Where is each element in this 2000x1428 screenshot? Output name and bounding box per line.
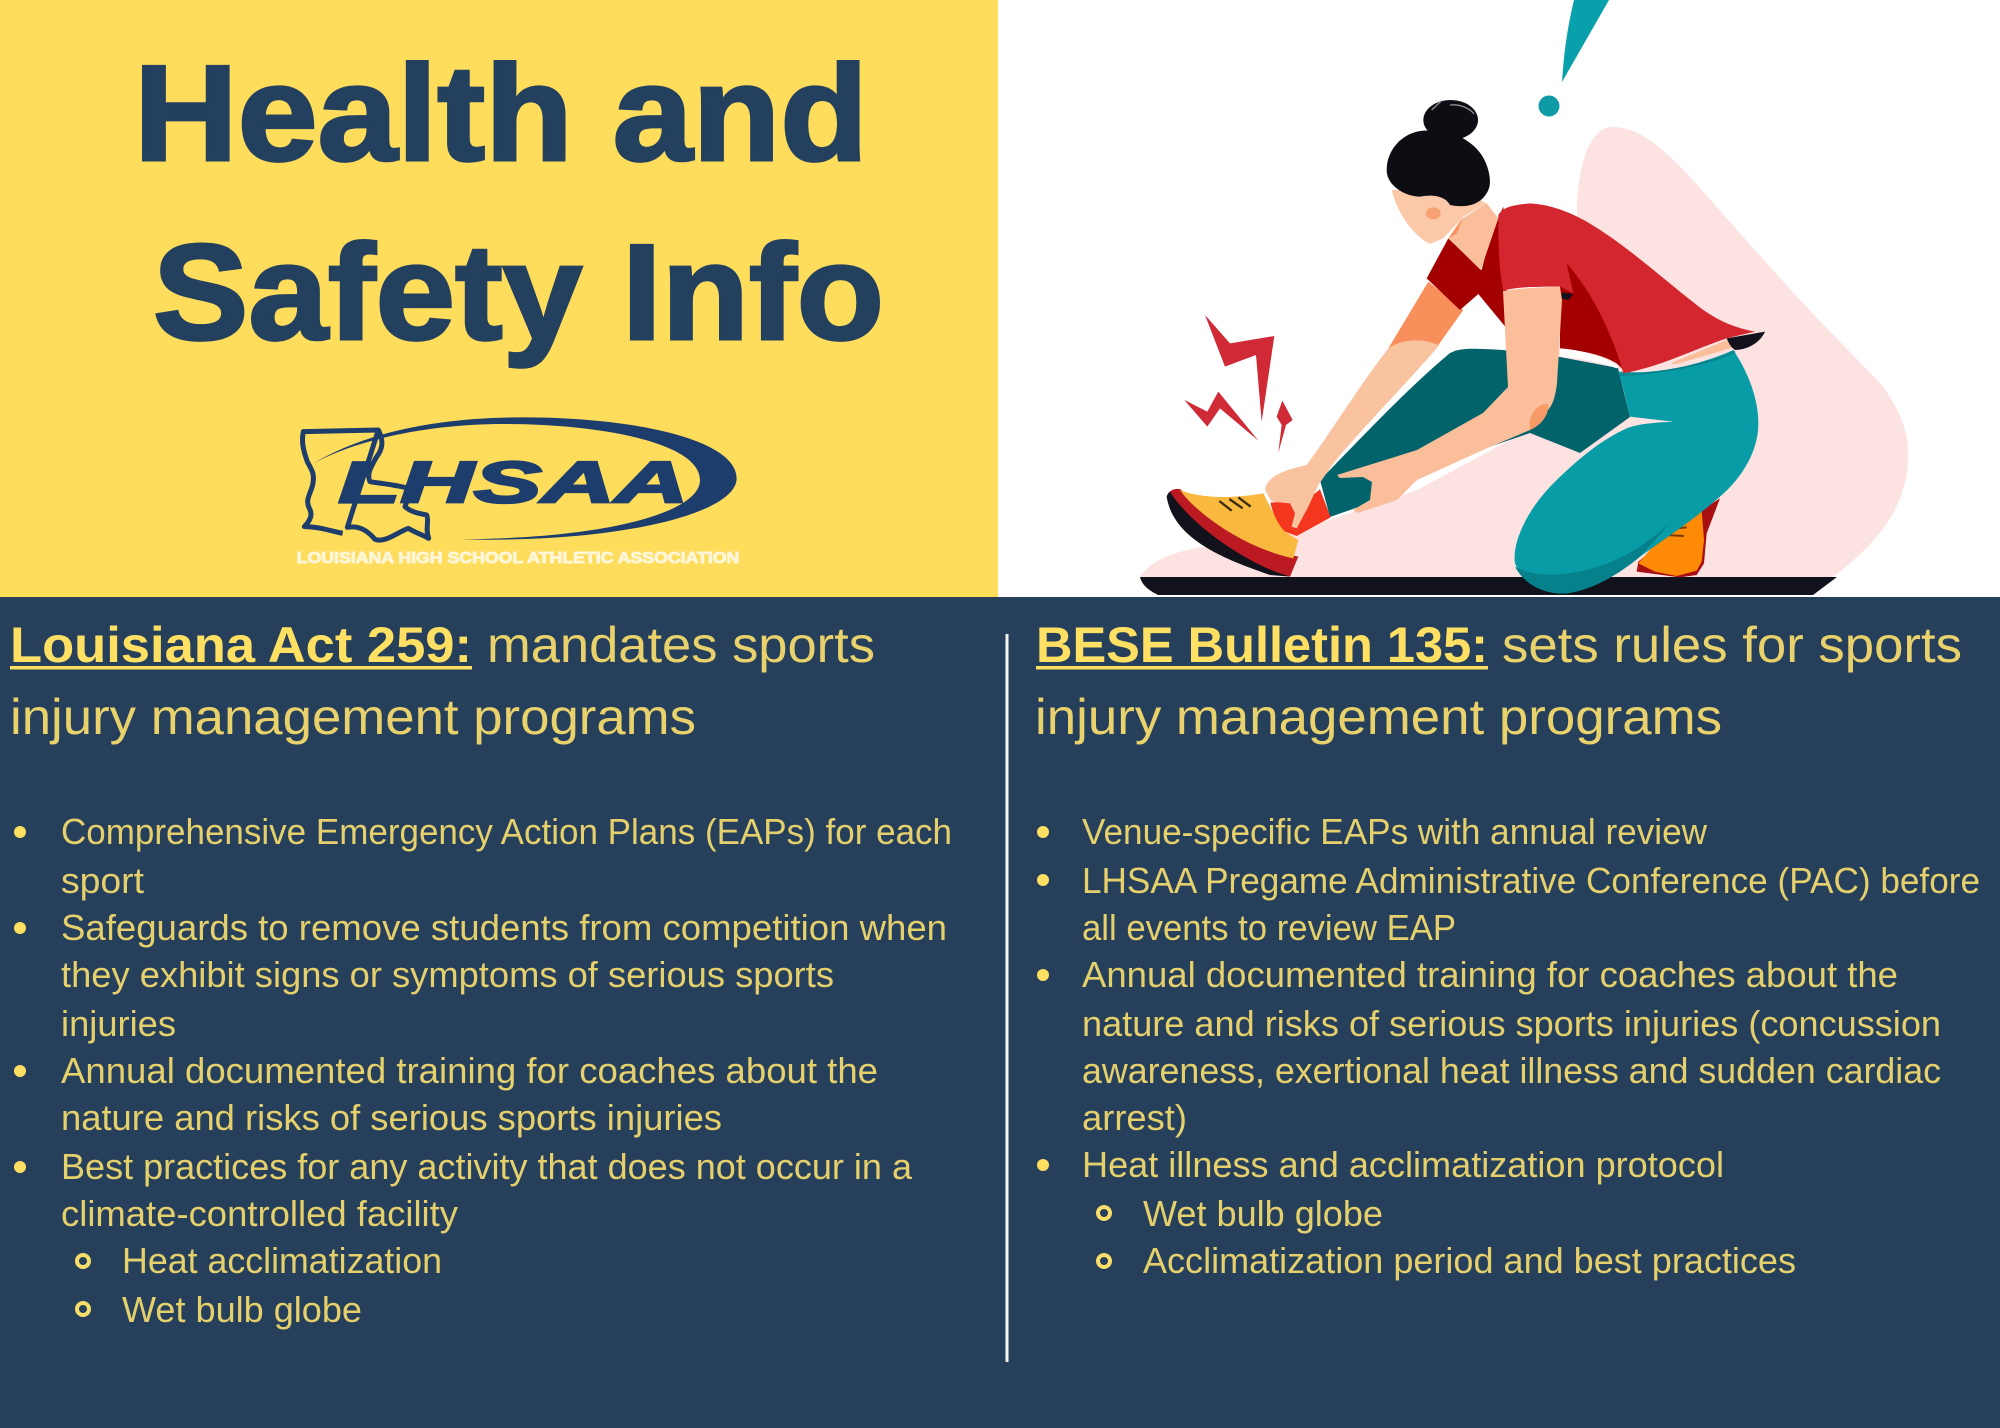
bullet list: Act 259 requirements: Comprehensive Emergency Action Plans (EAPs) for each (61, 811, 952, 852)
bullet list: Bulletin 135 requirements: awareness, exertional heat illness and sudden cardiac (1082, 1050, 1941, 1091)
bullet list: Act 259 requirements: sport (61, 860, 144, 901)
panel: Louisiana Act 259 (10, 617, 952, 1330)
bullet list: Bulletin 135 requirements: Heat illness and acclimatization protocol (1082, 1144, 1724, 1185)
bullet list: Bulletin 135 requirements (1037, 811, 1980, 1281)
logo: LHSAA (297, 417, 739, 567)
heading: Louisiana Act 259 (10, 617, 875, 745)
heading: Louisiana Act 259: mandates sports (487, 617, 875, 673)
heading: BESE Bulletin 135: BESE Bulletin 135: (1036, 617, 1488, 673)
title: Health and (134, 37, 868, 189)
bullet list: Bulletin 135 requirements: arrest) (1082, 1097, 1187, 1138)
bullet list: Act 259 requirements: Wet bulb globe (122, 1289, 362, 1330)
heading: BESE Bulletin 135: injury management programs (1035, 689, 1722, 745)
bullet list: Act 259 requirements: injuries (61, 1003, 176, 1044)
heading: Louisiana Act 259: Louisiana Act 259: (10, 617, 472, 673)
panel: yellow title block (0, 0, 998, 597)
logo: LHSAA: LOUISIANA HIGH SCHOOL ATHLETIC ASSOCIATION (297, 550, 739, 567)
title (134, 37, 884, 368)
logo: LHSAA: LHSAA (338, 452, 688, 516)
divider between columns (1006, 634, 1008, 1362)
bullet list: Bulletin 135 requirements: Annual documented training for coaches about the (1082, 954, 1898, 995)
illustration: woman holding injured ankle (1140, 0, 1908, 595)
bullet list: Bulletin 135 requirements: Acclimatization period and best practices (1143, 1240, 1796, 1281)
bullet list: Act 259 requirements: climate-controlled facility (61, 1193, 458, 1234)
bullet list: Bulletin 135 requirements: Wet bulb globe (1143, 1193, 1383, 1234)
heading: Louisiana Act 259: injury management programs (10, 689, 696, 745)
bullet list: Act 259 requirements (14, 811, 952, 1330)
heading: BESE Bulletin 135 (1035, 617, 1962, 745)
title: Safety Info (153, 216, 884, 368)
panel: BESE Bulletin 135 (1035, 617, 1980, 1281)
bullet list: Bulletin 135 requirements: nature and risks of serious sports injuries (concussion (1082, 1003, 1941, 1044)
bullet list: Act 259 requirements: nature and risks of serious sports injuries (61, 1097, 722, 1138)
bullet list: Act 259 requirements: Safeguards to remove students from competition when (61, 907, 947, 948)
bullet list: Bulletin 135 requirements: all events to review EAP (1082, 907, 1456, 948)
bullet list: Act 259 requirements: Annual documented training for coaches about the (61, 1050, 878, 1091)
bullet list: Bulletin 135 requirements: Venue-specific EAPs with annual review (1082, 811, 1708, 852)
bullet list: Bulletin 135 requirements: LHSAA Pregame Administrative Conference (PAC) before (1082, 860, 1980, 901)
bullet list: Act 259 requirements: they exhibit signs or symptoms of serious sports (61, 954, 834, 995)
panel: navy content block (0, 597, 2000, 1428)
bullet list: Act 259 requirements: Heat acclimatization (122, 1240, 442, 1281)
heading: BESE Bulletin 135: sets rules for sports (1502, 617, 1962, 673)
bullet list: Act 259 requirements: Best practices for any activity that does not occur in a (61, 1146, 913, 1187)
